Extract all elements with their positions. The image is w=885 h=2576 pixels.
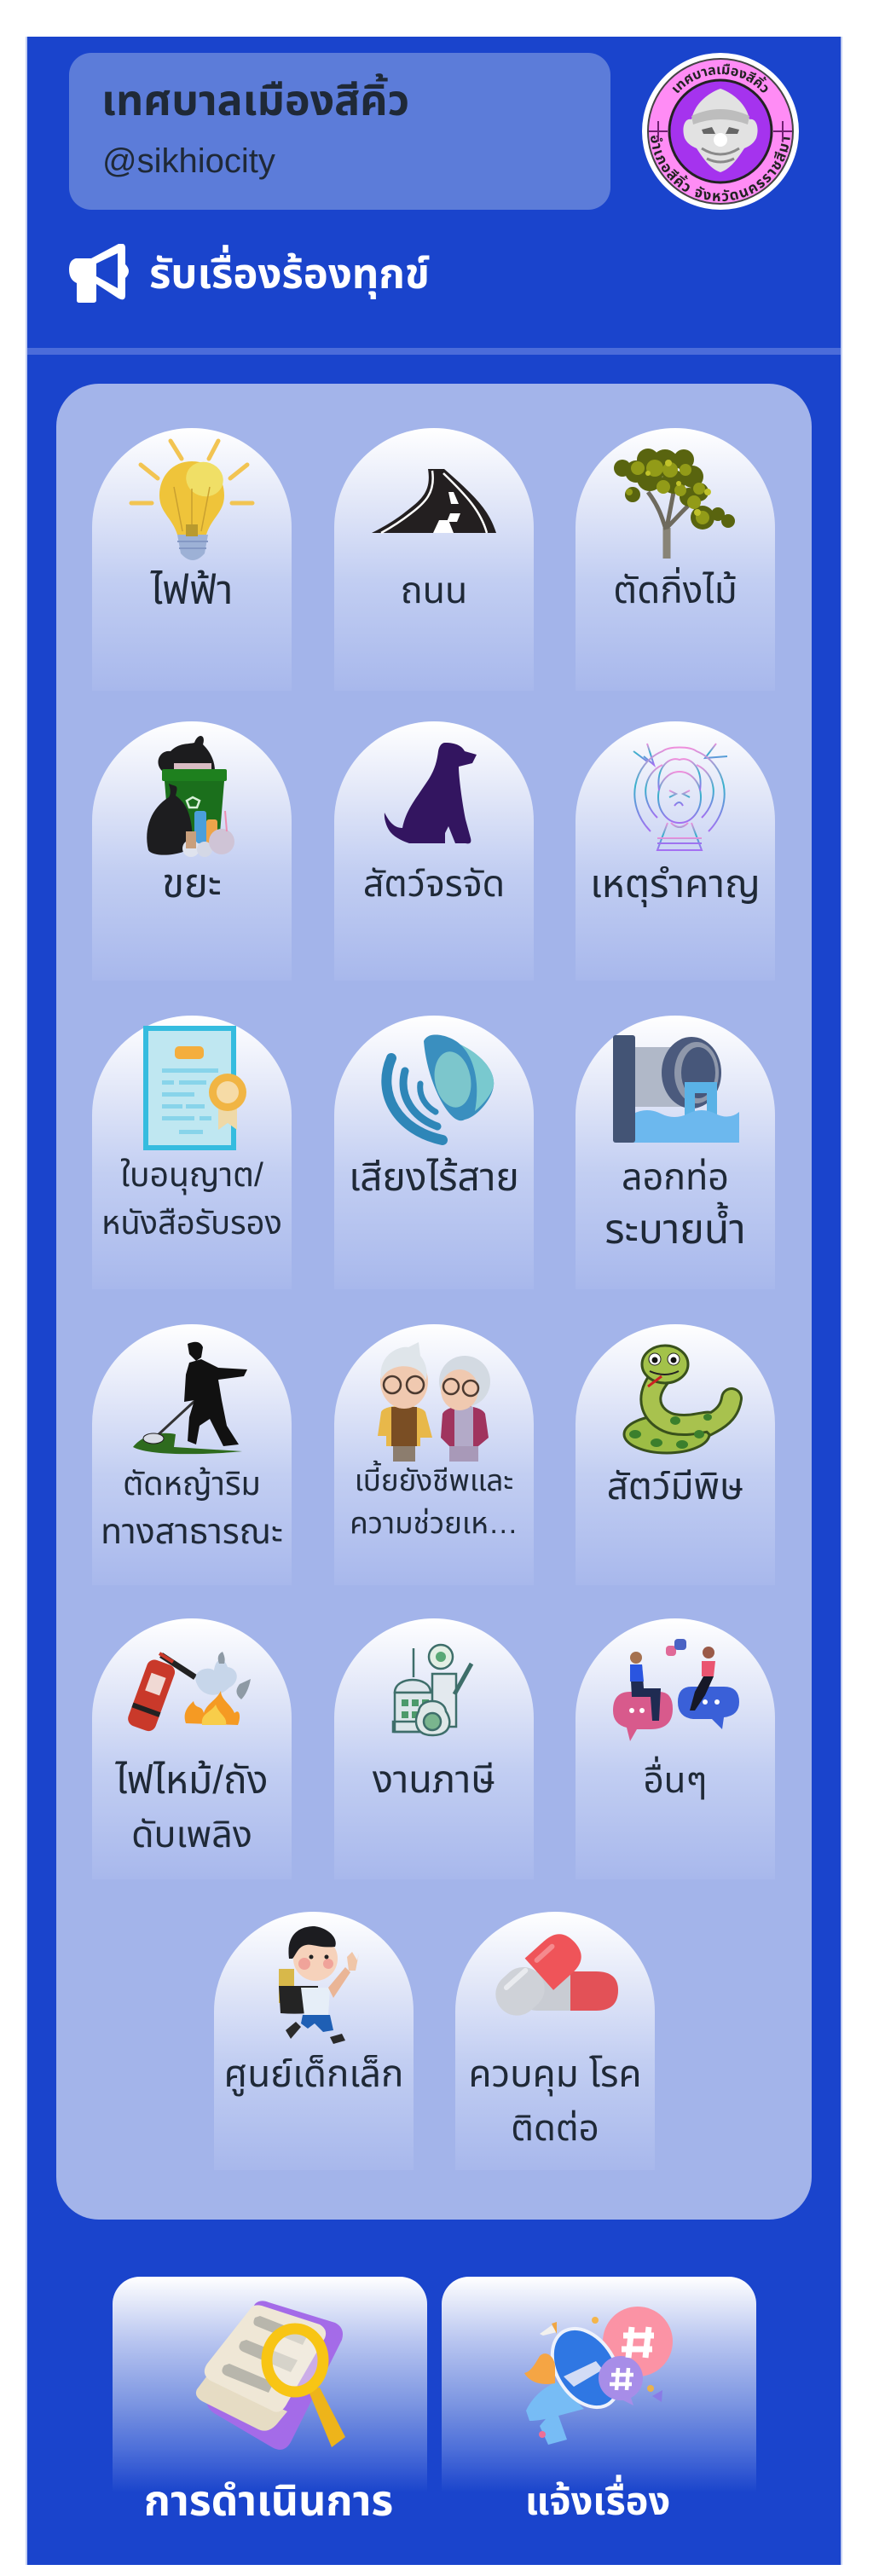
card: fire (92, 1618, 292, 1879)
card: disease control (455, 1912, 655, 2170)
card: nuisance (576, 721, 775, 981)
label: สัตว์มีพิษ (607, 1466, 743, 1508)
icon: municipality logo (642, 53, 799, 210)
icon: annoyed girl (633, 744, 728, 851)
action label: progress: การดำเนินการ (144, 2477, 393, 2525)
icon: tree (614, 449, 735, 559)
label line 2: ทางสาธารณะ (101, 1512, 283, 1551)
label: งานภาษี (373, 1757, 495, 1801)
card: drain cleaning (576, 1016, 775, 1289)
action label: report: แจ้งเรื่อง (525, 2480, 670, 2523)
icon: dog (384, 743, 477, 844)
label line 2: หนังสือรับรอง (101, 1206, 282, 1242)
card: licence (92, 1016, 292, 1289)
label: ไฟไหม้/ถัง (116, 1757, 268, 1802)
label: ขยะ (162, 860, 222, 906)
icon: megaphone (69, 244, 129, 303)
card: garbage (92, 721, 292, 981)
handle: @sikhiocity (102, 142, 275, 180)
icon: fire extinguisher (128, 1652, 251, 1731)
icon: drain pipe (613, 1035, 739, 1143)
card: child centre (214, 1912, 414, 2170)
card: tree trimming (576, 428, 775, 691)
icon: documents with magnifier (196, 2301, 345, 2450)
label: ถนน (401, 570, 467, 611)
label: เบี้ยยังชีพและ (355, 1464, 513, 1497)
label: ศูนย์เด็กเล็ก (224, 2053, 403, 2095)
action card: progress (113, 2277, 427, 2492)
card: electricity (92, 428, 292, 691)
label: ตัดกิ่งไม้ (613, 570, 738, 611)
label line 2: ติดต่อ (511, 2108, 599, 2148)
card: elderly allowance (334, 1324, 534, 1585)
card: tax (334, 1618, 534, 1879)
icon: grass trimmer worker (133, 1342, 247, 1455)
organisation name: เทศบาลเมืองสีคิ้ว (101, 77, 409, 124)
card: venomous animals (576, 1324, 775, 1585)
icon: tax building and coins (392, 1644, 474, 1736)
label: ควบคุม โรค (468, 2053, 642, 2095)
label: สัตว์จรจัด (363, 864, 505, 905)
card: roadside grass (92, 1324, 292, 1585)
label: ลอกท่อ (622, 1157, 729, 1198)
icon: light bulb (130, 438, 254, 560)
label line 2: ระบายน้ำ (604, 1207, 746, 1253)
label: อื่นๆ (644, 1760, 707, 1800)
label: เสียงไร้สาย (349, 1155, 519, 1199)
label: ไฟฟ้า (151, 567, 233, 612)
icon: pills (495, 1934, 618, 2016)
icon: elderly couple (378, 1342, 490, 1462)
section heading: รับเรื่องร้องทุกข์ (149, 252, 430, 298)
card: others (576, 1618, 775, 1879)
panel: complaint categories (56, 384, 812, 2220)
icon: colourful megaphone (524, 2307, 673, 2445)
label line 2: ความช่วยเห… (350, 1507, 518, 1540)
icon: schoolboy (279, 1926, 359, 2044)
icon: speaker (381, 1035, 495, 1145)
icon: people on speech bubbles (613, 1639, 739, 1741)
label: เหตุรำคาญ (590, 861, 761, 906)
icon: certificate (143, 1026, 246, 1150)
icon: municipality logo: เทศบาลเมืองสีคิ้ว (672, 63, 767, 93)
icon: road (372, 469, 496, 534)
card: wireless speaker (334, 1016, 534, 1289)
header card (69, 53, 610, 210)
header divider (27, 348, 841, 355)
icon: snake (622, 1344, 743, 1455)
action card: report (442, 2277, 756, 2492)
label: ตัดหญ้าริม (123, 1467, 261, 1502)
icon: trash bin (147, 736, 234, 857)
label: ใบอนุญาต/ (120, 1157, 263, 1194)
card: stray animals (334, 721, 534, 981)
card: road (334, 428, 534, 691)
icon: municipality logo: อำเภอสีคิ้ว จังหวัดนครราชสีมา (651, 136, 790, 201)
label line 2: ดับเพลิง (131, 1815, 252, 1855)
